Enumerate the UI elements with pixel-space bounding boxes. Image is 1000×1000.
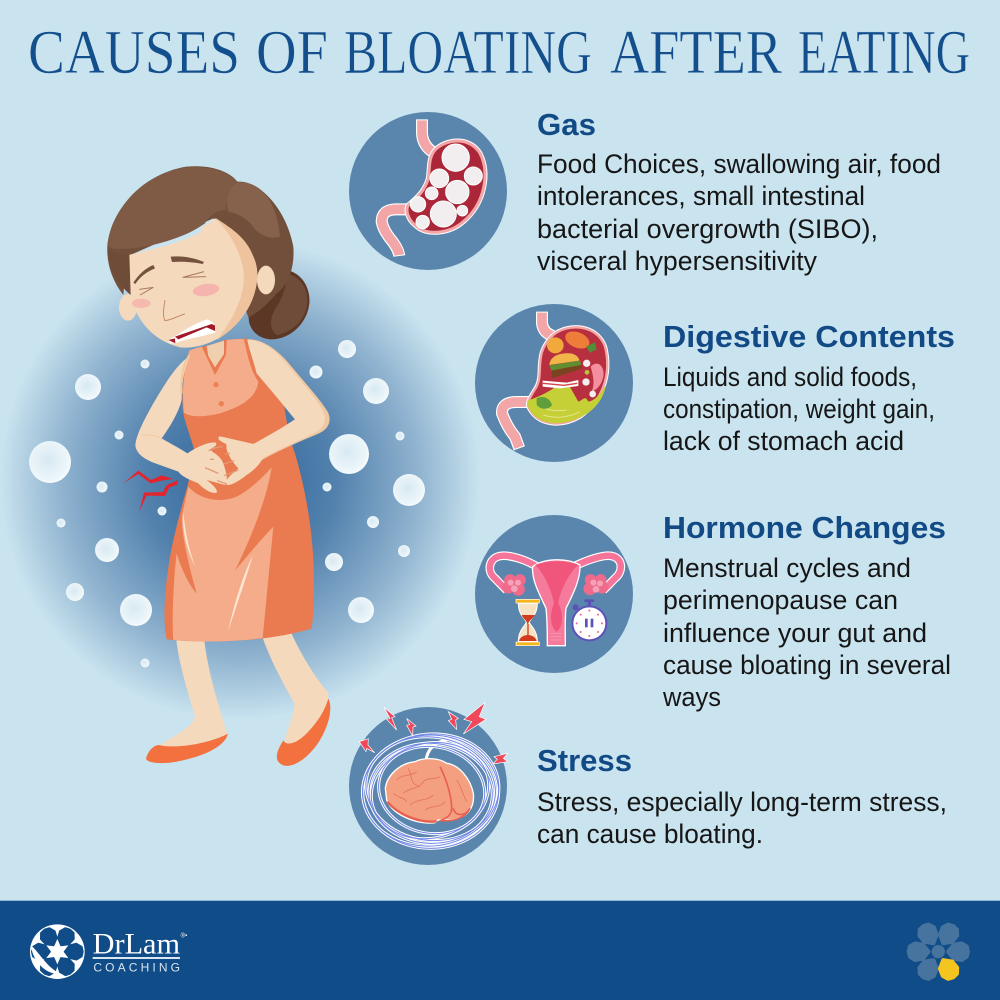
description: cause bloating in several bbox=[663, 650, 951, 680]
footer bar bbox=[0, 900, 1000, 1000]
stopwatch bbox=[572, 606, 606, 640]
dress bbox=[164, 338, 314, 642]
left ear bbox=[119, 294, 137, 321]
title bbox=[28, 19, 970, 87]
ovaries bbox=[503, 575, 608, 595]
description bbox=[663, 362, 935, 456]
logo: DrLam Coaching: COACHING bbox=[93, 961, 180, 975]
description bbox=[662, 553, 951, 712]
bacon bbox=[543, 380, 578, 388]
logo: DrLam Coaching: DrLam bbox=[93, 928, 180, 960]
title: OF bbox=[256, 19, 328, 87]
right ear bbox=[257, 266, 275, 294]
hair bbox=[107, 166, 294, 317]
burger bbox=[549, 353, 579, 365]
logo: flower mark bbox=[908, 921, 968, 982]
description: Stress, especially long-term stress, bbox=[537, 787, 947, 817]
description: Liquids and solid foods, bbox=[663, 362, 917, 392]
heading: Digestive Contents bbox=[663, 319, 955, 354]
description: perimenopause can bbox=[663, 585, 898, 615]
logo: DrLam Coaching: ®• bbox=[181, 932, 187, 939]
icon: stomach with food bbox=[502, 312, 607, 448]
description: ways bbox=[662, 682, 721, 712]
icon: stressed brain bbox=[357, 702, 508, 853]
hair bun bbox=[249, 270, 309, 339]
uterus bbox=[533, 560, 580, 646]
description: constipation, weight gain, bbox=[663, 394, 935, 424]
legs and shoes bbox=[146, 630, 330, 766]
section: Digestive Contents bbox=[663, 319, 955, 456]
arms and hands bbox=[135, 339, 330, 493]
bubbles around the woman bbox=[29, 340, 425, 668]
hourglass bbox=[518, 603, 537, 642]
front hair bbox=[107, 167, 237, 249]
prawn bbox=[591, 364, 604, 392]
logo: DrLam Coaching bbox=[30, 924, 187, 979]
food items bbox=[547, 337, 564, 353]
description: lack of stomach acid bbox=[663, 426, 904, 456]
description: intolerances, small intestinal bbox=[537, 181, 865, 211]
icon: stomach with gas bubbles bbox=[382, 119, 485, 256]
tangled wires bbox=[357, 727, 504, 853]
title: AFTER bbox=[610, 19, 783, 87]
lightning bolts bbox=[359, 702, 508, 764]
mouth bbox=[168, 319, 215, 344]
description: bacterial overgrowth (SIBO), bbox=[537, 214, 878, 244]
icon circles bbox=[349, 112, 633, 865]
woman illustration bbox=[107, 166, 330, 766]
description: Food Choices, swallowing air, food bbox=[537, 149, 941, 179]
pain lightning lines bbox=[123, 471, 178, 512]
description: Menstrual cycles and bbox=[663, 553, 911, 583]
green liquid bbox=[527, 385, 606, 423]
title: BLOATING bbox=[344, 19, 592, 87]
background glow behind the woman bbox=[0, 240, 480, 720]
facial features bbox=[133, 265, 155, 284]
section: Gas bbox=[537, 107, 941, 276]
face bbox=[128, 218, 257, 348]
heading: Gas bbox=[537, 107, 596, 142]
description: visceral hypersensitivity bbox=[537, 246, 817, 276]
description: can cause bloating. bbox=[537, 819, 763, 849]
heading: Hormone Changes bbox=[663, 510, 946, 545]
section: Hormone Changes bbox=[662, 510, 951, 712]
icon: uterus, hourglass and stopwatch bbox=[490, 556, 621, 646]
title: CAUSES bbox=[28, 19, 240, 87]
head bbox=[107, 166, 309, 348]
brain bbox=[385, 759, 474, 823]
section: Stress bbox=[537, 743, 947, 849]
heading: Stress bbox=[537, 743, 632, 778]
description: influence your gut and bbox=[663, 618, 927, 648]
description bbox=[537, 787, 947, 849]
description bbox=[537, 149, 941, 276]
